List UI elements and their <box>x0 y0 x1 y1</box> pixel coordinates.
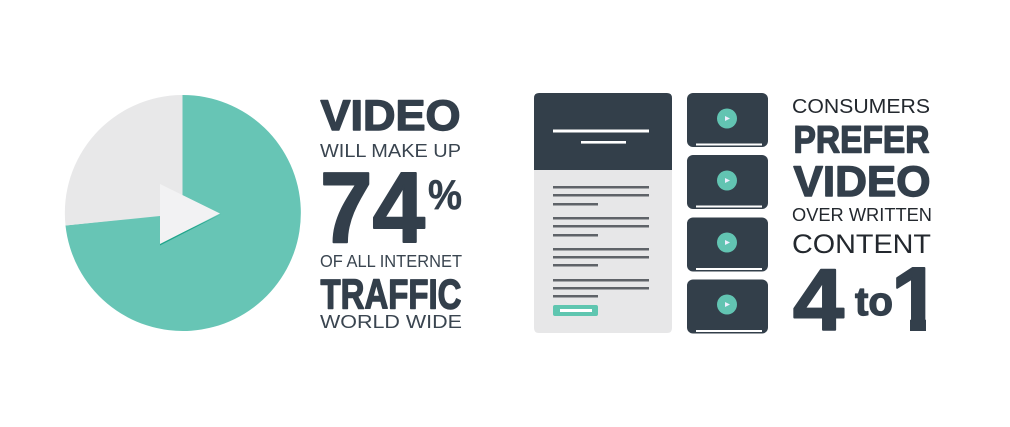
video thumbnail 2 <box>687 155 768 209</box>
text block: consumers prefer video over written content 4 to 1 <box>792 96 944 350</box>
video thumbnail 3 <box>687 218 768 272</box>
panel: written article page <box>534 93 672 333</box>
text block: video will make up 74% of all internet traffic world wide: % <box>428 171 462 218</box>
text block: consumers prefer video over written content 4 to 1: 1 <box>891 250 941 350</box>
text block: video will make up 74% of all internet traffic world wide: WILL MAKE UP <box>320 140 461 161</box>
video thumbnail 1 <box>687 93 768 147</box>
panel: video thumbnails <box>687 93 768 334</box>
text block: video will make up 74% of all internet traffic world wide <box>320 92 462 332</box>
text block: consumers prefer video over written content 4 to 1: VIDEO <box>794 158 930 206</box>
text block: video will make up 74% of all internet traffic world wide: WORLD WIDE <box>320 311 462 332</box>
text block: consumers prefer video over written content 4 to 1: to <box>855 280 893 324</box>
text block: consumers prefer video over written content 4 to 1: CONSUMERS <box>792 96 930 118</box>
text block: video will make up 74% of all internet traffic world wide: VIDEO <box>320 92 460 140</box>
text block: consumers prefer video over written content 4 to 1: OVER WRITTEN <box>792 204 932 225</box>
text block: consumers prefer video over written content 4 to 1: 4 <box>793 252 844 348</box>
article heading lines <box>553 130 649 144</box>
icon: play triangle <box>160 184 222 246</box>
article button <box>553 305 598 316</box>
text block: consumers prefer video over written content 4 to 1: CONTENT <box>792 229 931 259</box>
article body text lines <box>553 186 649 298</box>
text block: consumers prefer video over written content 4 to 1: PREFER <box>794 120 930 162</box>
pie chart: 74% video traffic <box>65 95 301 331</box>
text block: video will make up 74% of all internet traffic world wide: OF ALL INTERNET <box>320 251 462 271</box>
video thumbnail 4 <box>687 280 768 334</box>
text block: video will make up 74% of all internet traffic world wide: TRAFFIC <box>320 270 462 318</box>
text block: video will make up 74% of all internet traffic world wide: 74 <box>320 152 425 264</box>
